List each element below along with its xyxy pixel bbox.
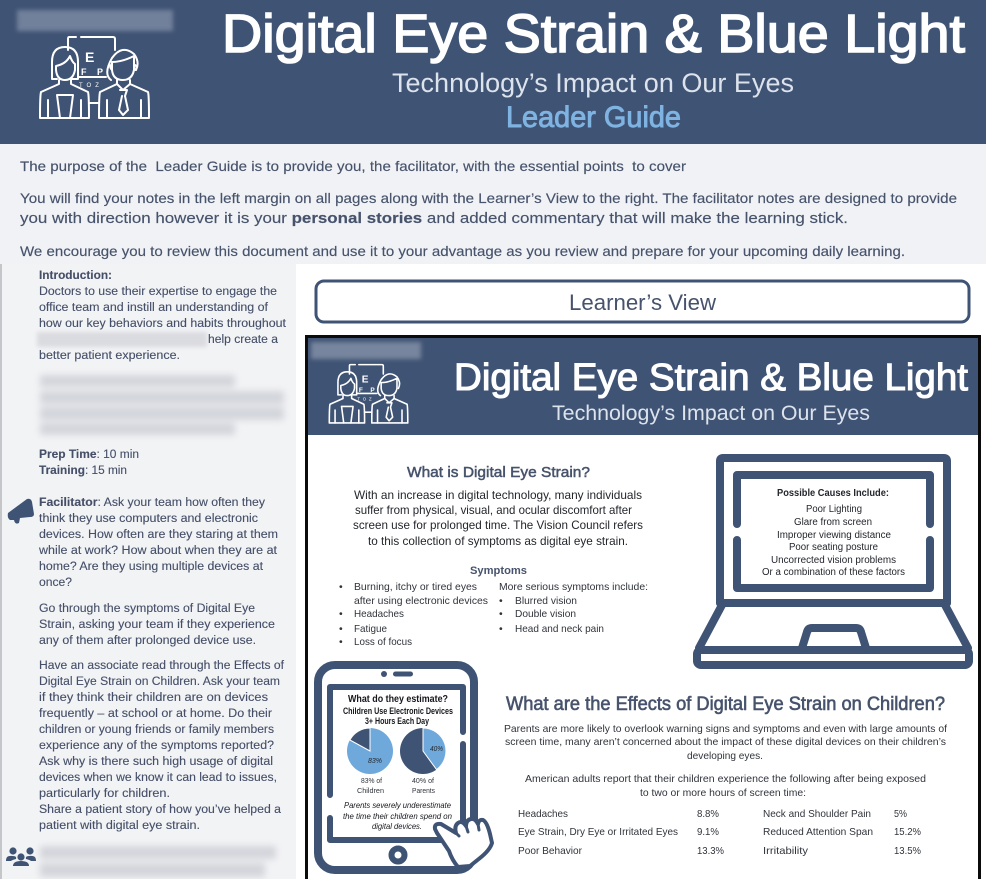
- introduction notes: better patient experience.: [39, 348, 180, 362]
- icon: doctors with eye chart: TOZ: [79, 83, 103, 89]
- leader guide label: Leader Guide: [506, 101, 681, 134]
- symptoms list left: Loss of focus: [354, 636, 412, 648]
- symptoms list left: [339, 581, 488, 648]
- learner's view label: Learner’s View: [569, 290, 716, 315]
- facilitator notes text: if they think their children are on devices: [39, 690, 268, 704]
- facilitator notes text: once?: [39, 575, 72, 589]
- section heading: What are the Effects of Digital Eye Strain on Children?: [506, 694, 945, 715]
- statistics table: 9.1%: [697, 826, 719, 838]
- prep and training times: Training: 15 min: [39, 463, 127, 477]
- introductory text block: We encourage you to review this document and use it to your advantage as you review and prepare for your upcoming daily learning.: [20, 243, 905, 259]
- introductory text block: The purpose of the Leader Guide is to provide you, the facilitator, with the essential points to cover: [20, 158, 686, 174]
- prep and training times: Prep Time: 10 min: [39, 447, 139, 461]
- pie chart: parents 40%: [400, 728, 446, 774]
- pie chart: parents 40%: 40%: [430, 744, 443, 753]
- symptoms list left: Burning, itchy or tired eyes: [354, 581, 477, 593]
- statistics table: [518, 808, 921, 857]
- facilitator notes text: Have an associate read through the Effects of: [39, 658, 285, 672]
- symptoms list left: after using electronic devices: [354, 595, 488, 607]
- pie captions: Parents: [412, 786, 435, 795]
- icon: doctors with eye chart small: TOZ: [357, 397, 375, 402]
- introductory text block: [20, 158, 957, 259]
- definition paragraph: [353, 488, 643, 548]
- causes list: [762, 488, 905, 578]
- tablet graphic: estimates: [318, 665, 492, 870]
- causes list: Or a combination of these factors: [762, 567, 905, 578]
- icon: doctors with eye chart: P: [97, 67, 103, 77]
- icon: doctors with eye chart small: P: [370, 387, 375, 394]
- effects paragraph: Parents are more likely to overlook warning signs and symptoms and even with large amounts of: [504, 723, 947, 735]
- handout title: Digital Eye Strain & Blue Light: [454, 357, 968, 399]
- effects paragraph: American adults report that their children experience the following after being exposed: [525, 773, 926, 785]
- section: what is digital eye strain: [339, 464, 648, 648]
- subtitle: Technology’s Impact on Our Eyes: [392, 68, 794, 98]
- statistics table: Irritability: [763, 845, 809, 857]
- pie chart: children 83%: [347, 728, 393, 774]
- introduction notes: how our key behaviors and habits throughout: [39, 316, 287, 330]
- causes list: Uncorrected vision problems: [771, 555, 896, 566]
- pie captions: [357, 776, 435, 795]
- facilitator notes text: experience any of the symptoms reported?: [39, 738, 274, 752]
- tablet camera: [381, 671, 413, 677]
- statistics table: Headaches: [518, 808, 568, 820]
- panel: learner's view: [296, 264, 986, 879]
- facilitator notes text: home? Are they using multiple devices at: [39, 559, 264, 573]
- prep and training times: [39, 447, 139, 477]
- effects paragraph: developing eyes.: [687, 750, 763, 762]
- panel: facilitator notes: [0, 264, 296, 879]
- facilitator notes text: Ask why is there such high usage of digital: [39, 754, 273, 768]
- symptoms list left: Headaches: [354, 608, 404, 620]
- symptoms list right: Double vision: [515, 608, 576, 620]
- definition paragraph: to this collection of symptoms as digital eye strain.: [368, 534, 628, 548]
- italic note: the time their children spend on: [343, 811, 452, 821]
- effects paragraph: to two or more hours of screen time:: [640, 787, 806, 799]
- introductory text block: you with direction however it is your personal stories and added commentary that will make the learning stick.: [20, 211, 848, 227]
- causes list: Poor Lighting: [806, 504, 862, 515]
- icon: doctors with eye chart small: [329, 365, 408, 423]
- pie captions: 83% of: [361, 776, 383, 785]
- facilitator notes text: Share a patient story of how you’ve helped a: [39, 802, 281, 816]
- pie captions: Children: [357, 786, 384, 795]
- statistics table: 13.5%: [894, 845, 921, 857]
- facilitator notes text: devices when we know it can lead to issues,: [39, 770, 277, 784]
- definition paragraph: screen use for prolonged time. The Vision Council refers: [353, 518, 643, 532]
- facilitator notes text: children or young friends or family members: [39, 722, 274, 736]
- blurred organisation name: [17, 10, 173, 31]
- introduction notes: [37, 268, 287, 362]
- facilitator notes text: while at work? How about when they are at: [38, 543, 278, 557]
- icon: doctors with eye chart: E: [85, 49, 94, 65]
- symptoms list left: •: [339, 623, 343, 635]
- facilitator notes text: patient with digital eye strain.: [39, 818, 200, 832]
- facilitator notes text: [38, 495, 285, 832]
- italic note: digital devices.: [372, 821, 422, 831]
- section heading: What is Digital Eye Strain?: [407, 464, 590, 481]
- effects paragraph: screen time, many aren’t concerned about the impact of these digital devices on their children’s: [505, 736, 946, 748]
- symptoms list right: •: [499, 623, 503, 635]
- definition paragraph: suffer from physical, visual, and ocular discomfort after: [355, 503, 632, 517]
- tablet body: [318, 665, 474, 870]
- tablet heading: [343, 694, 453, 727]
- icon: doctors with eye chart: F: [81, 67, 87, 77]
- effects paragraph: [504, 723, 947, 799]
- introduction notes: office team and instill an understanding of: [39, 300, 269, 314]
- introduction notes: Doctors to use their expertise to engage the: [39, 284, 277, 298]
- facilitator notes text: Strain, asking your team if they experience: [39, 617, 275, 631]
- symptoms list left: •: [339, 608, 343, 620]
- handout frame: [306, 336, 980, 879]
- statistics table: Neck and Shoulder Pain: [763, 808, 871, 820]
- causes list: Glare from screen: [794, 517, 872, 528]
- statistics table: Eye Strain, Dry Eye or Irritated Eyes: [518, 826, 678, 838]
- symptoms heading: Symptoms: [470, 565, 527, 577]
- symptoms list right: Blurred vision: [515, 595, 577, 607]
- blurred organisation name: [311, 342, 421, 359]
- causes list: Possible Causes Include:: [777, 488, 889, 499]
- icon: group of people: [6, 847, 36, 866]
- header banner: [0, 0, 986, 144]
- facilitator notes text: Digital Eye Strain on Children. Ask your team: [39, 674, 280, 688]
- statistics table: Poor Behavior: [518, 845, 582, 857]
- facilitator notes text: frequently – at school or at home. Do their: [39, 706, 272, 720]
- icon: doctors with eye chart small: F: [359, 387, 363, 394]
- tablet heading: 3+ Hours Each Day: [365, 716, 430, 727]
- laptop body: [697, 458, 969, 665]
- tablet heading: Children Use Electronic Devices: [343, 706, 453, 717]
- symptoms list left: Fatigue: [354, 623, 387, 635]
- facilitator notes text: Go through the symptoms of Digital Eye: [39, 601, 255, 615]
- section: effects on children: [504, 694, 947, 857]
- handout header: [308, 338, 978, 435]
- blurred paragraph: [40, 375, 284, 435]
- icon: megaphone: [8, 499, 34, 524]
- introduction notes: help create a: [208, 332, 278, 346]
- statistics table: 5%: [894, 808, 907, 820]
- symptoms list left: •: [339, 636, 343, 648]
- learner's view label: [316, 281, 969, 322]
- statistics table: 8.8%: [697, 808, 719, 820]
- icon: doctors with eye chart small: E: [362, 375, 369, 386]
- symptoms list right: •: [499, 595, 503, 607]
- symptoms list right: Head and neck pain: [515, 623, 604, 635]
- pie captions: 40% of: [412, 776, 435, 785]
- laptop graphic: possible causes: [697, 458, 969, 665]
- statistics table: 15.2%: [894, 826, 921, 838]
- facilitator notes text: think they use computers and electronic: [39, 511, 258, 525]
- symptoms list left: •: [339, 581, 343, 593]
- facilitator notes text: devices. How often are they staring at them: [39, 527, 278, 541]
- main title: Digital Eye Strain & Blue Light: [222, 4, 965, 64]
- introduction notes: Introduction:: [39, 268, 112, 282]
- facilitator notes text: Facilitator: Ask your team how often they: [39, 495, 266, 509]
- italic note: Parents severely underestimate: [344, 800, 451, 810]
- statistics table: 13.3%: [697, 845, 724, 857]
- italic note: [343, 800, 452, 831]
- handout subtitle: Technology’s Impact on Our Eyes: [552, 402, 870, 425]
- introductory text block: You will find your notes in the left margin on all pages along with the Learner’s View to the right. The facilitator notes are designed to provide: [20, 190, 957, 206]
- symptoms list right: [499, 581, 648, 635]
- causes list: Improper viewing distance: [777, 530, 891, 541]
- facilitator notes text: particularly for children.: [39, 786, 170, 800]
- icon: doctors with eye chart: [40, 37, 149, 118]
- causes list: Poor seating posture: [789, 542, 878, 553]
- symptoms list right: •: [499, 608, 503, 620]
- tablet heading: What do they estimate?: [348, 694, 448, 705]
- definition paragraph: With an increase in digital technology, many individuals: [354, 488, 642, 502]
- facilitator notes text: any of them after prolonged device use.: [39, 633, 256, 647]
- icon: pointing hand: [435, 819, 492, 867]
- pie chart: children 83%: 83%: [368, 756, 382, 765]
- statistics table: Reduced Attention Span: [763, 826, 873, 838]
- blurred bottom note: [40, 846, 276, 877]
- symptoms list right: More serious symptoms include:: [499, 581, 648, 593]
